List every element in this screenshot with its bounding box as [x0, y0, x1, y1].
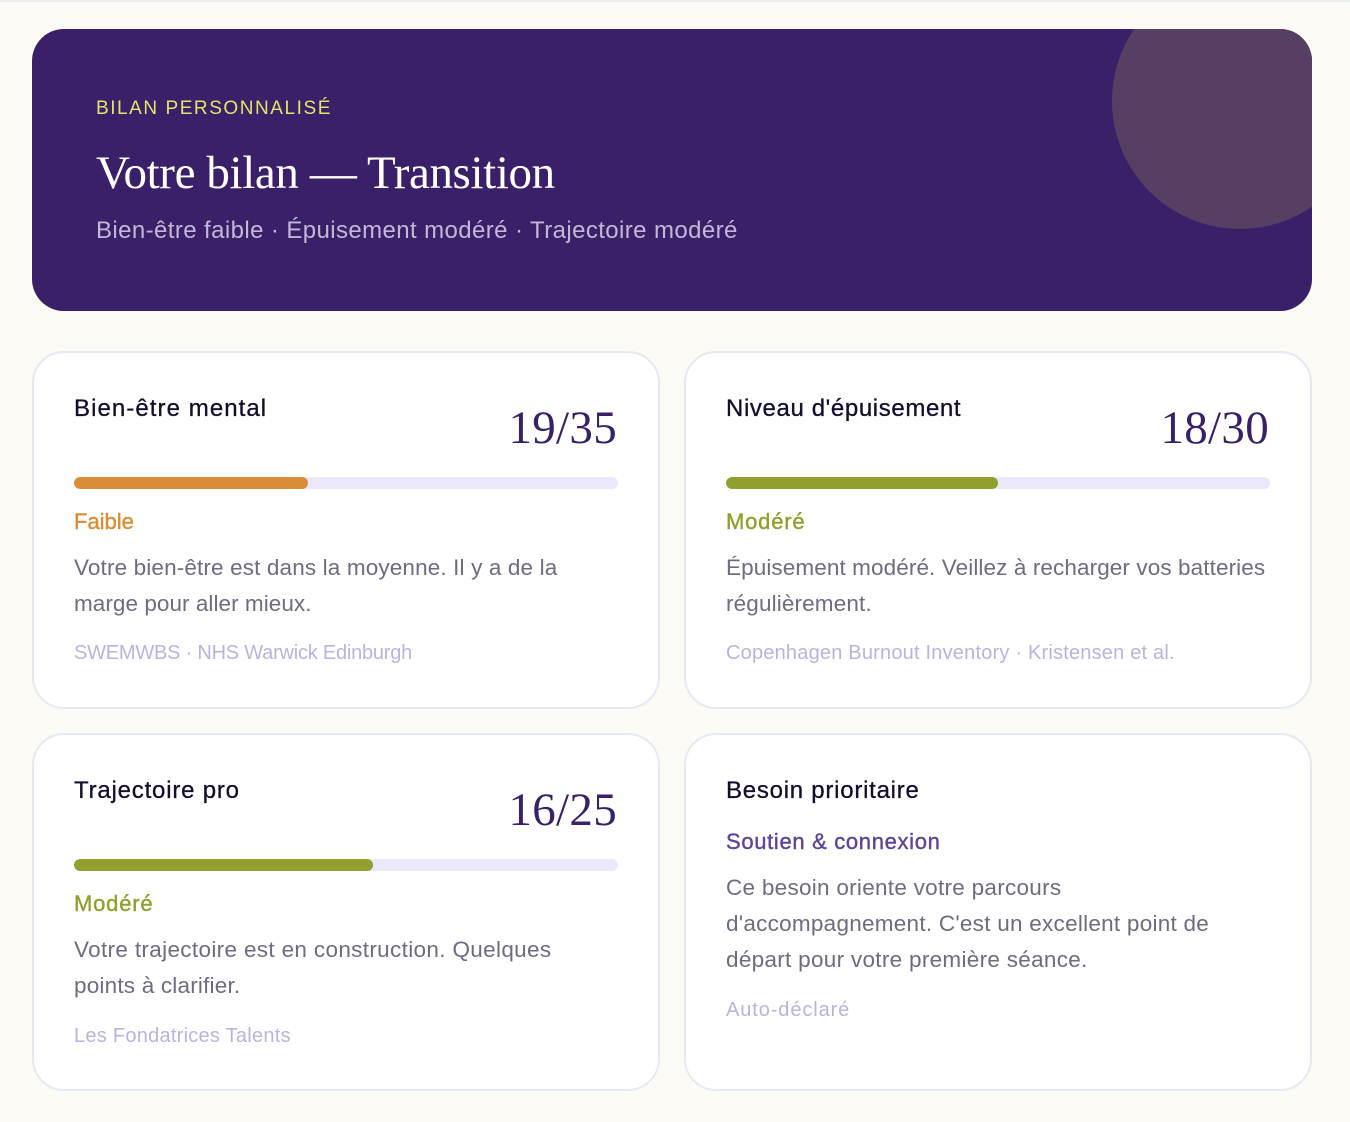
progress bar: [74, 477, 618, 489]
description: [726, 555, 1265, 616]
header banner: [32, 29, 1312, 311]
progress bar: [74, 859, 618, 871]
level label: Modéré: [726, 509, 805, 534]
description: d'accompagnement. C'est un excellent point de: [726, 911, 1209, 936]
card title: Besoin prioritaire: [726, 777, 920, 804]
description: Votre bien-être est dans la moyenne. Il y a de la: [74, 555, 557, 580]
card: besoin prioritaire: [684, 733, 1312, 1091]
card title: Trajectoire pro: [74, 777, 240, 804]
description: points à clarifier.: [74, 973, 240, 998]
description: [726, 875, 1209, 972]
description: Ce besoin oriente votre parcours: [726, 875, 1061, 900]
description: départ pour votre première séance.: [726, 947, 1088, 972]
level label: Faible: [74, 509, 134, 534]
score: 19/35: [508, 402, 617, 454]
subtitle: Bien-être faible · Épuisement modéré · Trajectoire modéré: [96, 217, 738, 244]
top edge line: [0, 0, 1350, 2]
main heading: Votre bilan — Transition: [96, 147, 555, 199]
card title: Niveau d'épuisement: [726, 395, 961, 422]
level label: Modéré: [74, 891, 153, 916]
priority need: Soutien & connexion: [726, 829, 941, 854]
progress bar: [726, 477, 1270, 489]
source: Les Fondatrices Talents: [74, 1025, 291, 1047]
description: marge pour aller mieux.: [74, 591, 312, 616]
card: trajectoire pro: [32, 733, 660, 1091]
source: Auto-déclaré: [726, 999, 850, 1021]
source: SWEMWBS · NHS Warwick Edinburgh: [74, 642, 412, 664]
description: Votre trajectoire est en construction. Quelques: [74, 937, 551, 962]
card: bien-être mental: [32, 351, 660, 709]
card title: Bien-être mental: [74, 395, 267, 422]
description: Épuisement modéré. Veillez à recharger vos batteries: [726, 555, 1265, 580]
score: 18/30: [1160, 402, 1269, 454]
description: [74, 937, 551, 998]
source: Copenhagen Burnout Inventory · Kristensen et al.: [726, 642, 1175, 664]
decorative circle: [1112, 0, 1350, 229]
score: 16/25: [508, 784, 617, 836]
eyebrow label: BILAN PERSONNALISÉ: [96, 98, 332, 119]
description: régulièrement.: [726, 591, 872, 616]
card: niveau d'épuisement: [684, 351, 1312, 709]
description: [74, 555, 558, 616]
